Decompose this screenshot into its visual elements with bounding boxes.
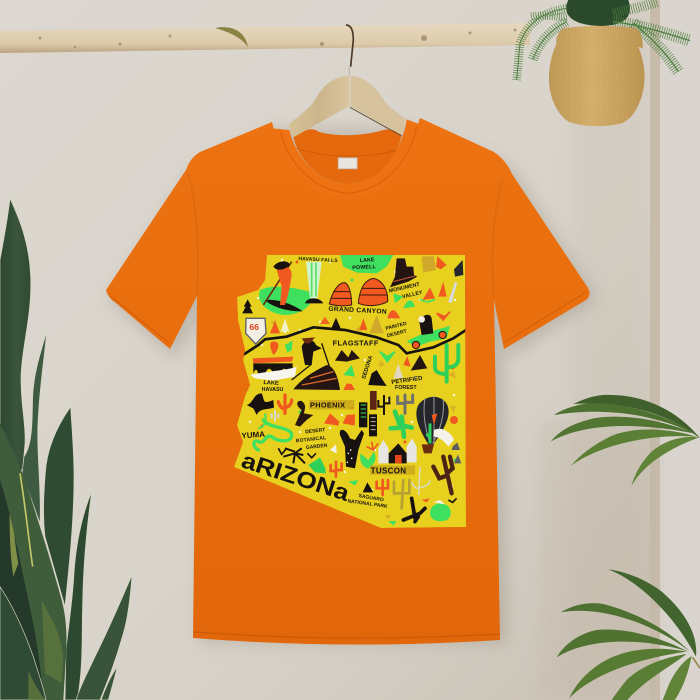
saguaro national park label (347, 493, 388, 510)
red rock buttes (329, 278, 388, 306)
pine trees (242, 299, 253, 313)
upper map details: FLAGSTAFF (333, 339, 379, 348)
upper map details: DESERT (386, 329, 407, 339)
scattered flecks (249, 259, 456, 520)
desert botanical garden label: DESERT (305, 427, 326, 435)
decorative top right (422, 256, 436, 273)
waterfall (306, 262, 322, 298)
black bird (247, 393, 274, 415)
small black cactus (403, 498, 425, 522)
desert botanical garden label (296, 428, 328, 449)
phoenix label: PHOENIX (310, 401, 345, 410)
yuma label: YUMA (241, 430, 265, 440)
orange rocks (324, 413, 339, 426)
skyscrapers (359, 402, 367, 427)
large brown saguaro (433, 457, 453, 493)
neck label (338, 158, 357, 169)
hot air balloon (416, 396, 461, 463)
upper map details: LAKE (360, 257, 375, 264)
saguaro green (435, 345, 458, 382)
agave plants (283, 448, 305, 463)
big ARIZONA title: aRIZONa (238, 447, 353, 506)
hiker (292, 337, 332, 380)
green patches (340, 255, 393, 273)
snake plant leaves (0, 198, 132, 700)
upper map details: GRAND CANYON (328, 306, 387, 316)
upper map details: VALLEY (402, 290, 424, 300)
wooden hanger (288, 25, 406, 137)
desert botanical garden label: BOTANICAL (296, 435, 327, 444)
Sedona rocks and plants (368, 370, 387, 386)
woven basket (549, 26, 645, 126)
upper map details: PETRIFIED (391, 376, 424, 386)
plant foliage (517, 0, 690, 80)
shirt shadow (109, 129, 597, 643)
saguaro national park label: NATIONAL PARK (347, 498, 388, 510)
lower map details: FOREST (395, 385, 417, 391)
green snake (254, 420, 292, 450)
bridge (250, 341, 297, 381)
upper map details: PAINTED (385, 321, 408, 332)
palm fronds bottom right (557, 569, 700, 700)
highway road (242, 327, 466, 355)
shirt collar and inner neck (272, 119, 422, 200)
Arizona map print (234, 255, 466, 528)
lower map details: HAVASU (262, 387, 284, 393)
dark mountain (293, 365, 340, 390)
monument valley butte (390, 258, 417, 287)
petrified forest stones (393, 363, 403, 378)
tucson label: TUSCON (371, 466, 406, 475)
palm fronds top right (551, 395, 700, 486)
small dark cactus (378, 395, 389, 415)
green barrel cactus (430, 503, 451, 521)
orange and grey cactus (278, 395, 292, 413)
desert botanical garden label: GARDEN (306, 443, 328, 451)
dark prickly pear (295, 401, 313, 427)
leaf on pole (215, 27, 248, 47)
green car (407, 315, 450, 349)
yellow state outline (234, 255, 466, 528)
hanging plant (517, 0, 690, 126)
upper map details: MONUMENT (388, 282, 421, 295)
lower map details (238, 385, 461, 526)
upper map details (242, 255, 466, 390)
mission church (378, 438, 417, 463)
wooden pole (0, 23, 530, 53)
orange t-shirt (106, 118, 590, 645)
route 66 shield: 66 (249, 322, 259, 332)
route 66 shield (246, 318, 266, 344)
place names: HAVASU FALLS (298, 256, 338, 264)
green saguaro (391, 412, 412, 437)
upper map details: POWELL (352, 264, 377, 271)
black prickly pear (340, 430, 364, 468)
saguaro national park label: SAGUARO (358, 493, 384, 503)
upper map details: LAKE (263, 380, 279, 387)
upper map details: SEDONA (361, 355, 374, 380)
paddle boarder (263, 261, 303, 311)
small hills (403, 300, 415, 308)
